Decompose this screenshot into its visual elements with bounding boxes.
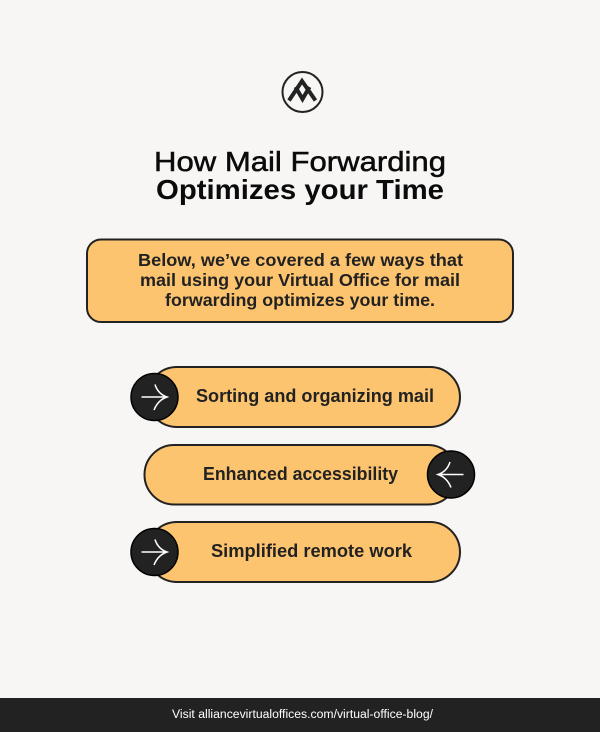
footer link text: Visit alliancevirtualoffices.com/virtual-office-blog/	[172, 709, 434, 721]
title	[154, 146, 446, 205]
intro text: forwarding optimizes your time.	[165, 290, 435, 310]
label: Enhanced accessibility	[203, 464, 398, 484]
icon: logo	[282, 72, 322, 112]
footer bar	[0, 698, 600, 732]
title: How Mail Forwarding	[154, 146, 446, 177]
label: Sorting and organizing mail	[196, 386, 434, 406]
icon: left arrow	[428, 451, 474, 498]
intro text: mail using your Virtual Office for mail	[140, 270, 460, 290]
panel: intro callout	[87, 240, 513, 322]
label: Simplified remote work	[211, 541, 413, 561]
title: Optimizes your Time	[156, 174, 444, 205]
list item: simplified remote work	[131, 522, 460, 582]
list item: enhanced accessibility	[144, 445, 474, 504]
icon: right arrow	[131, 374, 178, 420]
intro text	[138, 250, 463, 310]
icon: right arrow	[131, 528, 178, 576]
intro text: Below, we’ve covered a few ways that	[138, 250, 463, 270]
list item: sorting and organizing mail	[131, 367, 460, 427]
